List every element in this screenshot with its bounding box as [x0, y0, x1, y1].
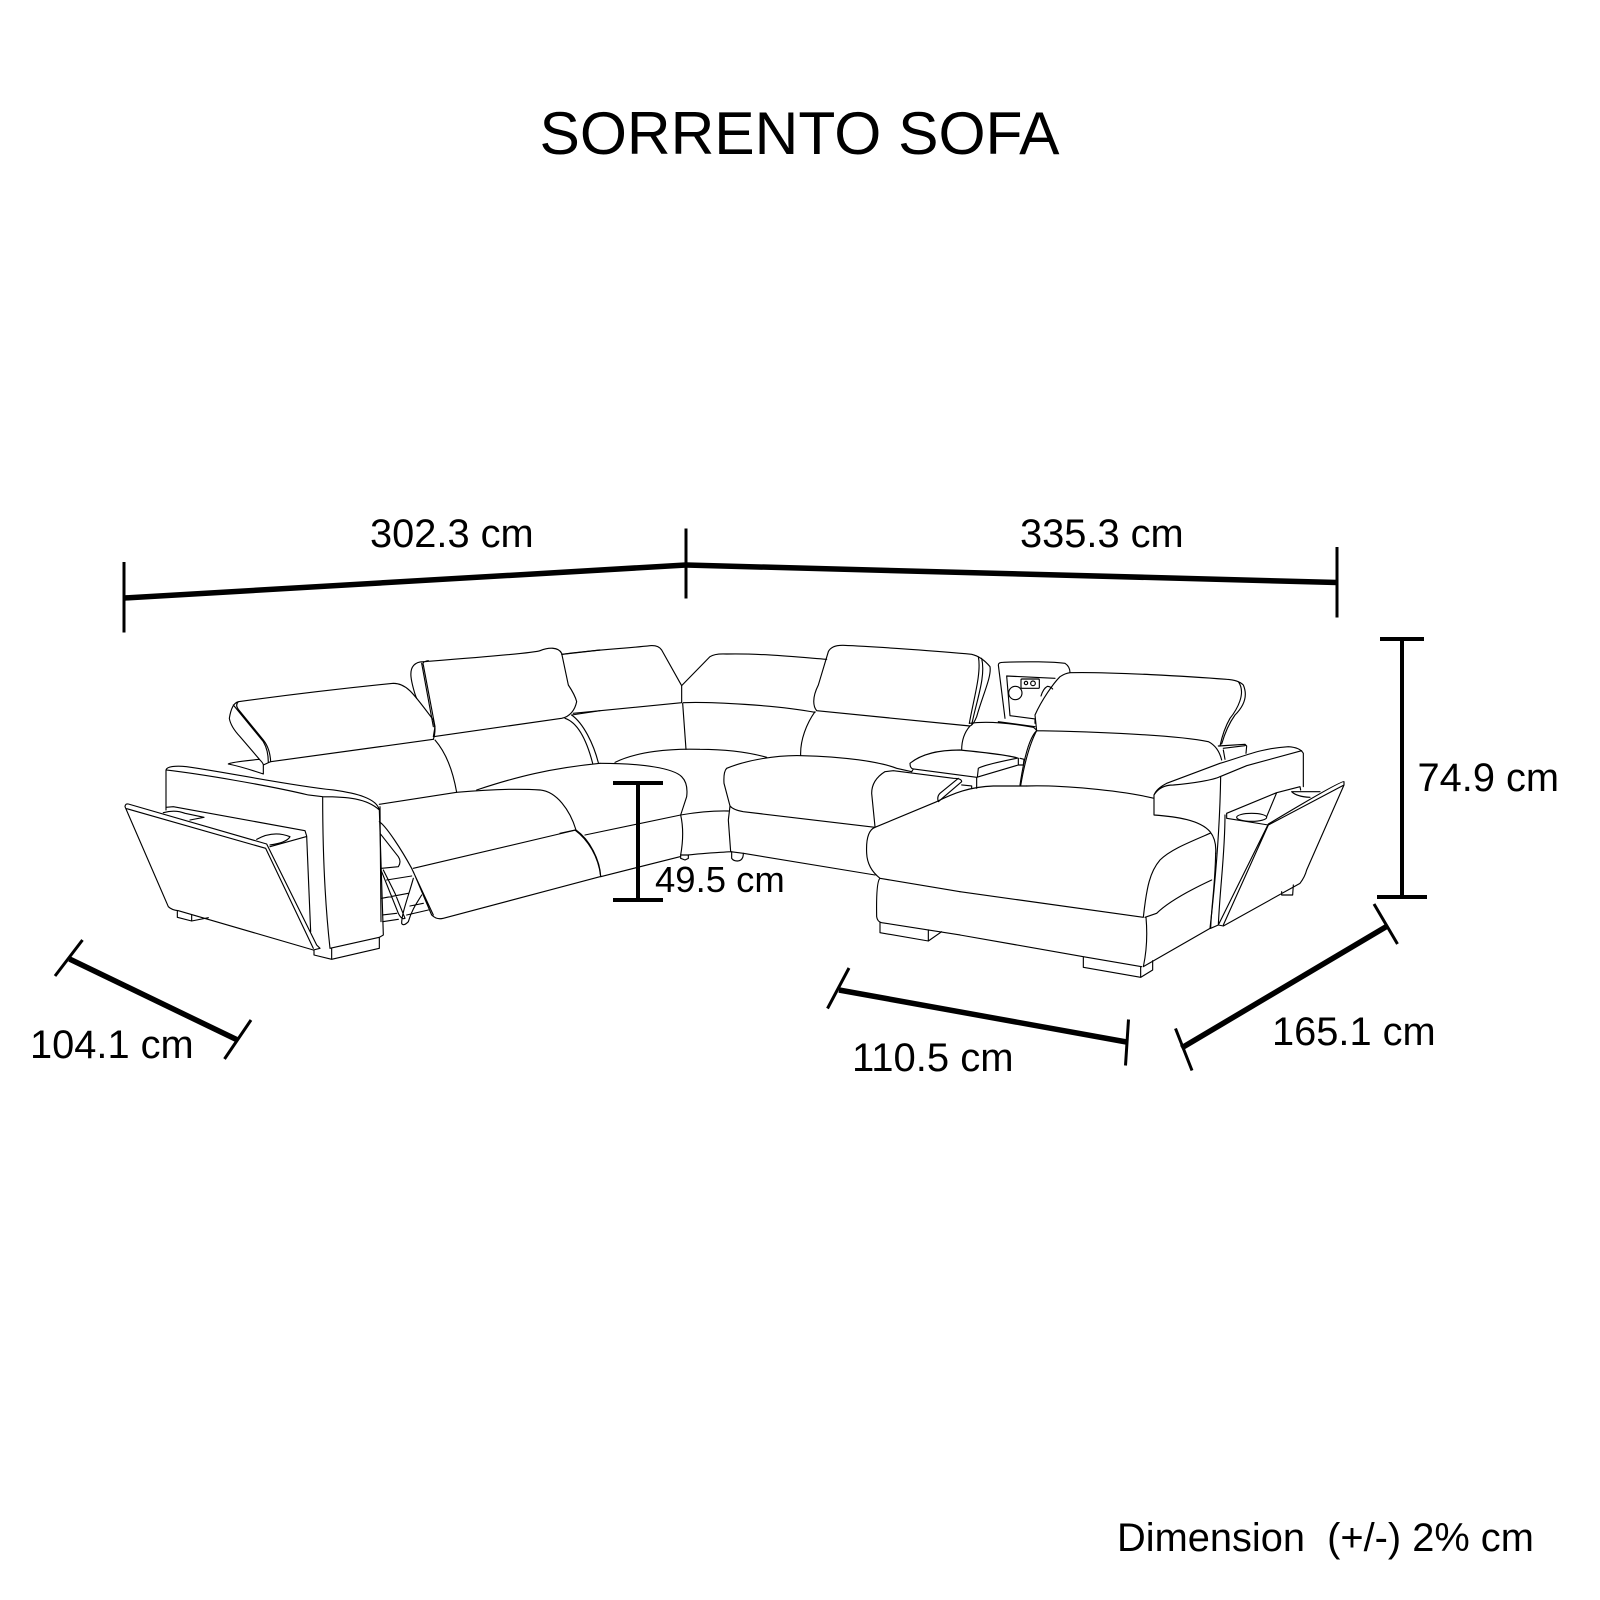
dimension: 165.1 cm — [1176, 904, 1436, 1070]
dimension: 49.5 cm — [613, 783, 785, 900]
right chaise section — [960, 662, 1344, 977]
dimension: 335.3 cm: 335.3 cm — [1020, 512, 1184, 556]
third and fourth headrests — [562, 646, 827, 749]
control buttons — [1009, 679, 1053, 700]
dimension: 302.3 cm — [124, 512, 686, 632]
right arm of centre seat — [872, 771, 962, 827]
right fold-out console — [1211, 782, 1344, 928]
dimension: 49.5 cm: 49.5 cm — [655, 859, 785, 900]
control panel — [998, 662, 1070, 723]
dimension: 110.5 cm: 110.5 cm — [852, 1036, 1014, 1080]
title: SORRENTO SOFA — [540, 99, 1060, 167]
left fold-out console — [125, 804, 320, 950]
chaise seat front — [867, 786, 1027, 941]
centre feet — [681, 852, 743, 861]
back cushions — [271, 715, 600, 792]
dimension: 335.3 cm — [686, 512, 1337, 618]
reclined seat and footrest — [379, 789, 601, 919]
dimension: 104.1 cm: 104.1 cm — [30, 1023, 194, 1067]
centre seat cushions — [600, 712, 912, 855]
dimension: 104.1 cm — [30, 940, 251, 1067]
right cup holders — [1237, 792, 1320, 821]
dimension: 165.1 cm: 165.1 cm — [1272, 1010, 1436, 1054]
dimension: 74.9 cm: 74.9 cm — [1418, 756, 1559, 800]
left recliner section — [125, 648, 601, 959]
chaise side — [960, 833, 1216, 967]
recliner mechanism — [380, 807, 428, 925]
left cup holders — [163, 811, 290, 845]
sofa line drawing — [125, 645, 1344, 977]
dimension: 302.3 cm: 302.3 cm — [370, 512, 534, 556]
outer headrest — [228, 683, 435, 774]
centre section — [560, 645, 1037, 941]
dimension: 74.9 cm — [1377, 639, 1559, 897]
left arm — [166, 766, 383, 959]
lower seat fronts — [560, 806, 875, 877]
fifth headrest — [814, 645, 990, 726]
tolerance note: Dimension (+/-) 2% cm — [1117, 1516, 1534, 1560]
second headrest — [411, 648, 600, 737]
cup console lid — [910, 722, 1037, 788]
dimension: 110.5 cm — [828, 968, 1128, 1080]
sixth headrest — [1021, 673, 1247, 786]
chaise foot — [960, 935, 1153, 977]
chaise top and arm — [1027, 747, 1303, 928]
